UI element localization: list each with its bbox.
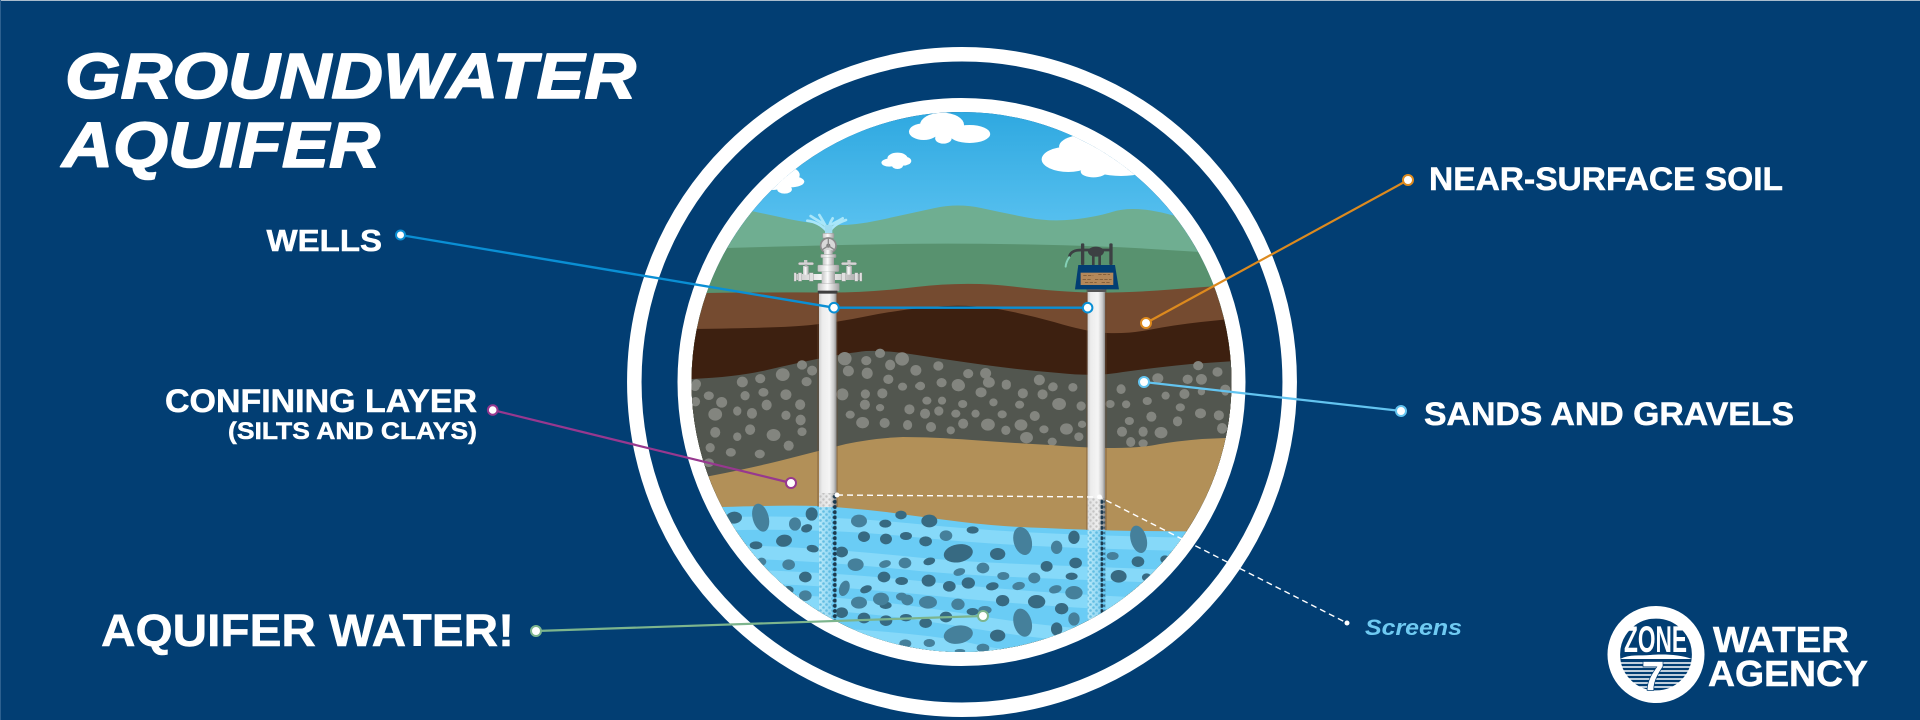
sky xyxy=(732,112,1191,240)
well pipe right xyxy=(1086,289,1107,620)
sands and gravels layer xyxy=(680,351,1250,660)
well pipe left xyxy=(817,291,838,620)
cross-section illustration xyxy=(680,110,1250,668)
logo wordmark xyxy=(1708,619,1868,694)
title: GROUNDWATER xyxy=(65,40,636,112)
light green hills xyxy=(692,206,1231,474)
title: AQUIFER xyxy=(60,109,380,181)
leader: near-surface soil xyxy=(1141,175,1413,328)
leader: sands and gravels xyxy=(1139,377,1406,416)
gravel stones upper xyxy=(692,349,1230,394)
dark soil layer xyxy=(680,306,1250,660)
leader: confining layer xyxy=(488,405,796,488)
label: confining layer: (SILTS AND CLAYS) xyxy=(228,418,477,445)
label: confining layer xyxy=(165,383,477,445)
outer white ring xyxy=(634,54,1290,710)
logo wordmark: WATER xyxy=(1713,619,1849,660)
aquifer stones lighter xyxy=(749,502,1150,653)
logo emblem xyxy=(1614,612,1698,699)
logo emblem: 7 xyxy=(1642,653,1664,699)
logo emblem: ZONE xyxy=(1624,619,1687,660)
clouds xyxy=(758,113,1156,194)
label: wells: WELLS xyxy=(266,223,382,258)
aquifer water xyxy=(722,506,1186,652)
aquifer stones dark xyxy=(726,507,1170,642)
leader: wells xyxy=(396,230,1092,313)
title xyxy=(60,40,636,181)
label: near-surface soil: NEAR-SURFACE SOIL xyxy=(1429,161,1783,197)
dark green hills xyxy=(680,244,1250,660)
leader: screens xyxy=(834,492,1350,626)
label: aquifer water: AQUIFER WATER! xyxy=(101,605,514,656)
leader: aquifer water xyxy=(531,611,988,636)
water bands xyxy=(728,516,1182,652)
near-surface soil layer xyxy=(680,284,1250,660)
label: confining layer: CONFINING LAYER xyxy=(165,383,477,419)
label: screens: Screens xyxy=(1365,615,1462,640)
icon: artesian wellhead with valves xyxy=(794,215,862,294)
icon: hand-pump well xyxy=(1066,243,1119,292)
label: sands and gravels: SANDS AND GRAVELS xyxy=(1424,396,1794,432)
gravel stones lower xyxy=(690,377,1229,467)
confining layer (silts and clays) xyxy=(708,437,1226,652)
inner white ring xyxy=(684,105,1238,659)
logo: Zone 7 Water Agency xyxy=(1614,612,1868,699)
logo wordmark: AGENCY xyxy=(1708,653,1868,694)
